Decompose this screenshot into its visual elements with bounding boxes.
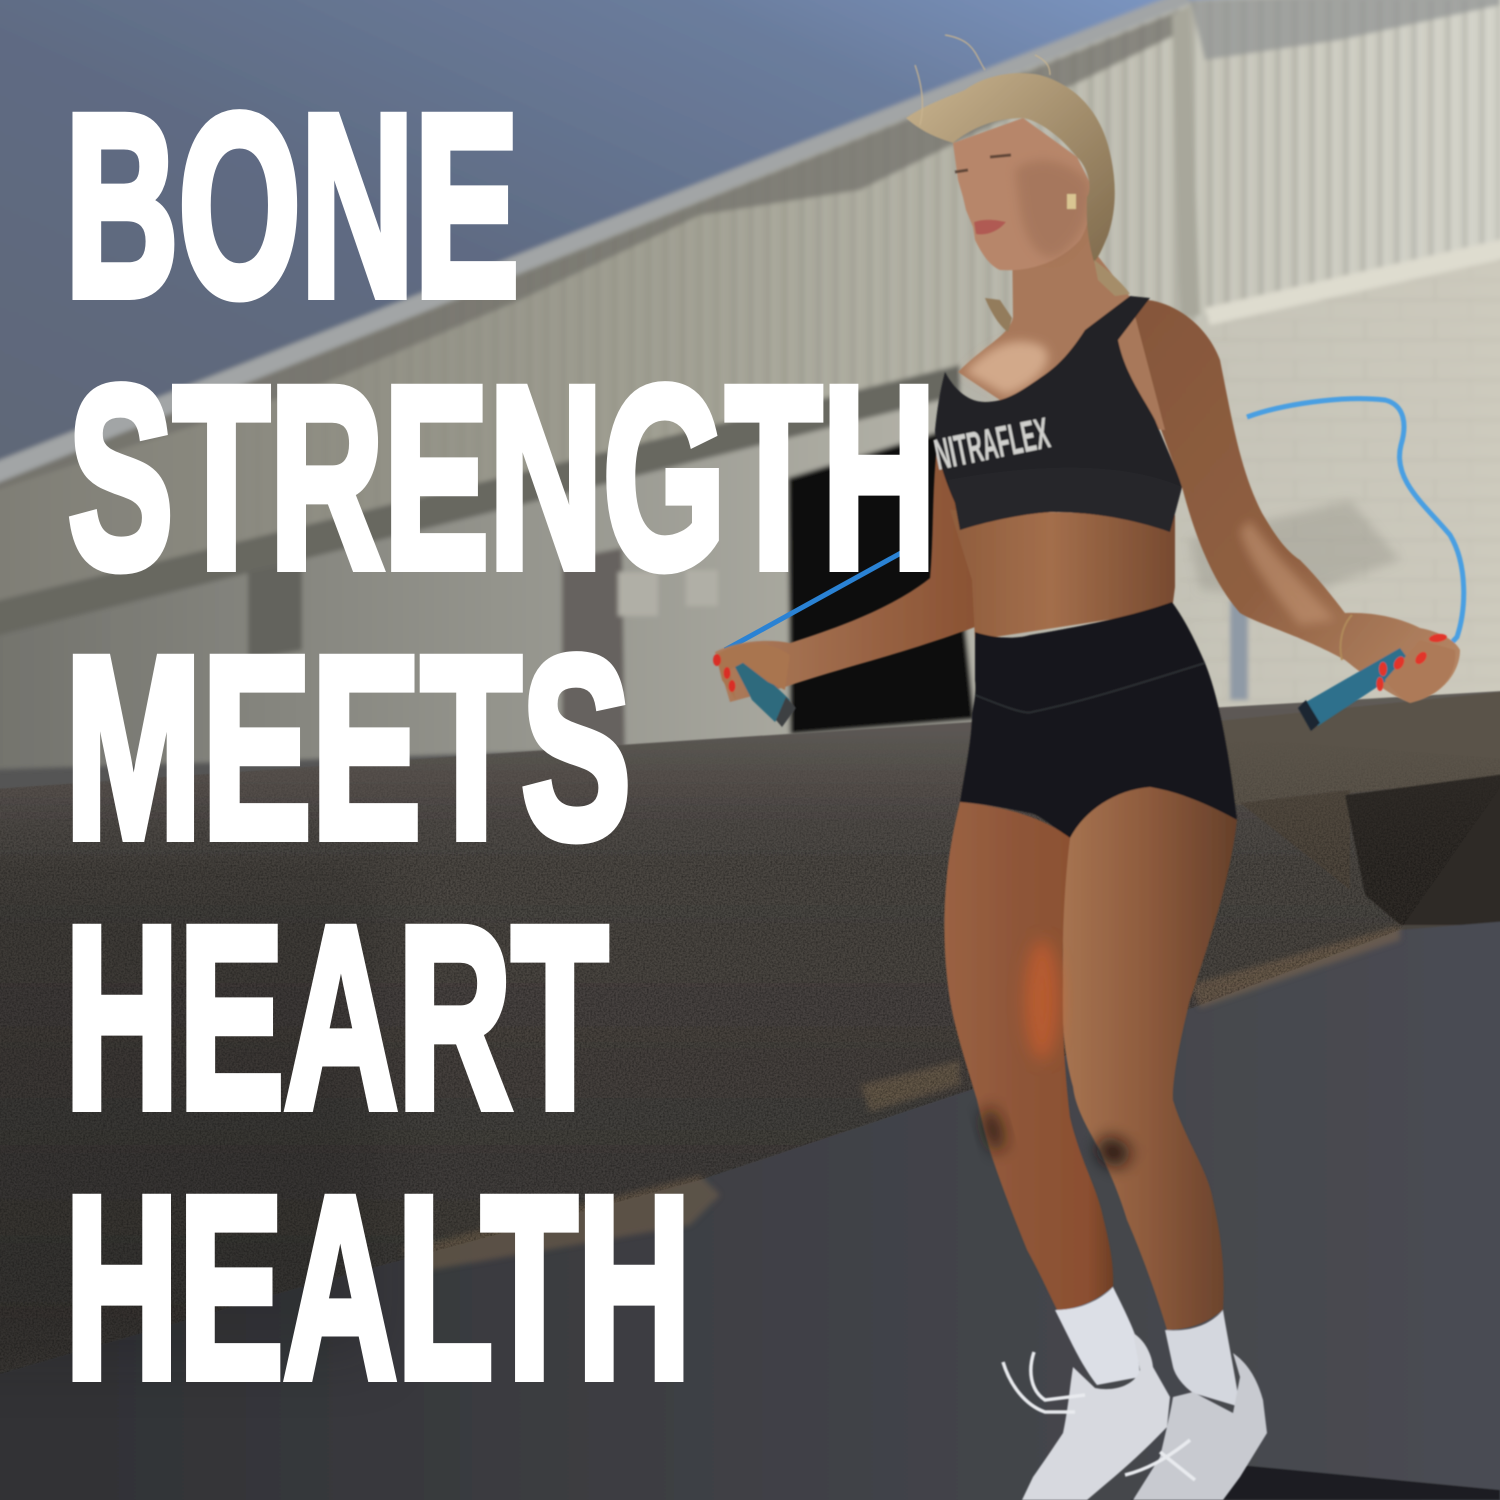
- ground layer: [0, 690, 1500, 1500]
- neck and chest: [958, 205, 1165, 430]
- building column: [1172, 5, 1200, 320]
- grass patch lower left: [400, 1175, 720, 1270]
- left hand: [716, 644, 790, 700]
- face: [953, 118, 1091, 270]
- left hand nails: [713, 654, 736, 692]
- far shoe: [1022, 1333, 1170, 1500]
- upper pavement right: [1180, 690, 1500, 805]
- inner thigh glow: [1024, 940, 1060, 1060]
- headline line 4: HEART: [65, 873, 608, 1162]
- headline line 2: STRENGTH: [68, 333, 936, 622]
- loose laces: [1003, 1352, 1195, 1480]
- lower hair wisp: [985, 298, 1012, 332]
- far knee shadow: [979, 1106, 1007, 1154]
- ground dirt bank: [0, 690, 1500, 1380]
- near knee shadow: [1092, 1132, 1134, 1172]
- right panel top shadow: [1190, 0, 1500, 60]
- wall shadow on right: [1190, 500, 1400, 600]
- handle grip: [1306, 648, 1412, 726]
- ribbed cladding texture: [938, 6, 1500, 367]
- sky: [0, 0, 1500, 540]
- bra hem band: [948, 468, 1182, 532]
- handle grip: [735, 660, 790, 722]
- building lower wall: [0, 240, 1500, 770]
- shoe shadow: [1130, 1465, 1500, 1500]
- face shadow: [1015, 160, 1090, 257]
- far sock: [1055, 1287, 1140, 1385]
- shorts waistband seam: [975, 663, 1205, 713]
- left double door: [248, 560, 302, 660]
- roof edge: [0, 0, 1195, 490]
- right hand fingers: [1385, 640, 1455, 703]
- shorts: [960, 602, 1237, 838]
- near leg: [1062, 787, 1237, 1330]
- hair: [906, 73, 1115, 262]
- rope, left segment: [725, 548, 910, 650]
- left handle: [735, 660, 796, 727]
- earring: [1067, 194, 1076, 209]
- far leg: [944, 802, 1113, 1310]
- headline line 5: HEALTH: [65, 1143, 691, 1432]
- ground grain: [0, 720, 1500, 1380]
- building and sky layer: [0, 0, 1500, 770]
- wall shadow band: [0, 365, 960, 640]
- sports bra: [935, 296, 1182, 532]
- downpipe: [1230, 600, 1248, 700]
- grass patch right: [1190, 925, 1400, 1008]
- ponytail: [1094, 260, 1130, 296]
- road: [0, 920, 1500, 1500]
- right wall trim: [1205, 235, 1500, 325]
- left dark shade behind text: [0, 860, 380, 1360]
- electric boxes: [618, 572, 658, 616]
- dry grass strips: [400, 925, 1400, 1270]
- roof shadow band: [0, 8, 1185, 495]
- grain texture: [0, 720, 1500, 1380]
- near shoe: [1133, 1353, 1267, 1500]
- headline: [65, 61, 936, 1432]
- side door: [562, 548, 625, 752]
- right arm: [1130, 299, 1460, 703]
- right hand nails: [1376, 633, 1447, 691]
- right handle: [1298, 648, 1412, 731]
- rope, right segment: [1247, 399, 1464, 650]
- headline line 1: BONE: [65, 61, 519, 350]
- flyaway hair strands: [915, 35, 1050, 125]
- athlete: NITRAFLEX: [930, 409, 1054, 480]
- eyes: [955, 155, 1011, 172]
- torso: [950, 510, 1175, 640]
- bracelet: [1340, 615, 1352, 660]
- lit chest highlight: [965, 341, 1048, 395]
- grass patch center: [860, 1060, 960, 1112]
- dark doorway: [788, 430, 975, 735]
- handle cap: [1298, 700, 1320, 731]
- athlete: [713, 35, 1464, 1500]
- left arm: [715, 400, 975, 702]
- handle cap: [776, 697, 796, 727]
- forearm highlight: [1240, 520, 1335, 625]
- concrete ledge shadow side: [1345, 772, 1500, 925]
- lips: [974, 220, 1006, 234]
- concrete ledge: [1240, 790, 1350, 890]
- block wall texture: [1180, 250, 1500, 720]
- near sock: [1165, 1310, 1240, 1407]
- building upper cladding: [0, 0, 1500, 625]
- headline line 3: MEETS: [65, 603, 631, 892]
